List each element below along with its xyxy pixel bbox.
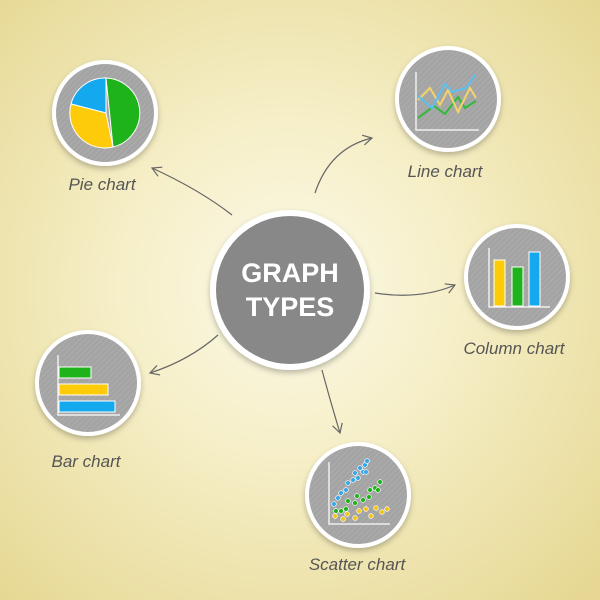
line chart: [395, 46, 501, 181]
center circle: graph types: [210, 210, 370, 370]
bar chart: [35, 330, 141, 471]
column chart: [463, 224, 570, 358]
scatter chart: Scatter chart: [309, 555, 406, 574]
bar chart: Bar chart: [52, 452, 122, 471]
scatter chart: [305, 442, 411, 574]
pie chart: [52, 60, 158, 194]
pie chart: Pie chart: [68, 175, 137, 194]
center circle: graph types: GRAPH: [241, 258, 339, 288]
column chart: Column chart: [463, 339, 566, 358]
line chart: Line chart: [408, 162, 484, 181]
center circle: graph types: TYPES: [246, 292, 334, 322]
arrows: [150, 138, 455, 433]
